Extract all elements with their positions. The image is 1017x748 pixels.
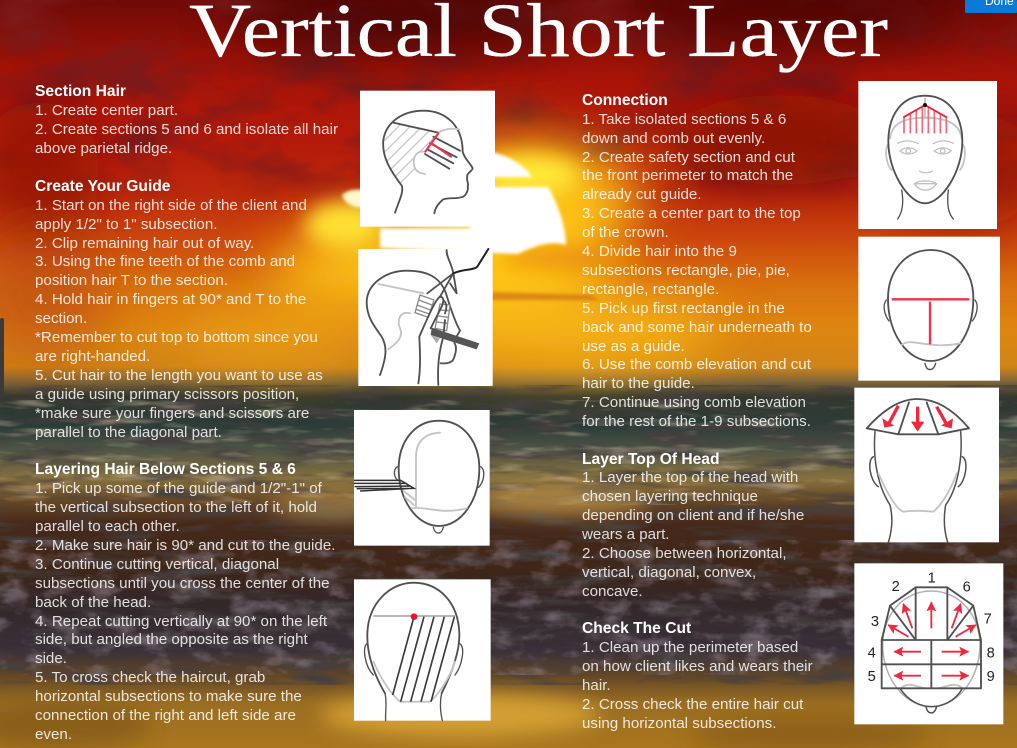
subsection numbers: 8 xyxy=(987,646,995,662)
text: Create Your Guide: *make sure your fingers and scissors are xyxy=(35,405,309,422)
text: Connection: 1. Take isolated sections 5 & 6 xyxy=(582,111,786,128)
text: Layering Hair Below Sections 5 & 6: 3. Continue cutting vertical, diagonal xyxy=(35,556,279,573)
sun xyxy=(342,150,600,300)
subsection numbers: 2 xyxy=(892,579,900,595)
subsection numbers: 7 xyxy=(984,612,992,628)
text: Connection: 4. Divide hair into the 9 xyxy=(582,243,737,260)
text: Layering Hair Below Sections 5 & 6: 5. To cross check the haircut, grab xyxy=(35,669,265,686)
text: Layer Top Of Head xyxy=(582,450,804,600)
subsection numbers: 5 xyxy=(868,669,876,685)
text: Create Your Guide: 5. Cut hair to the length you want to use as xyxy=(35,367,323,384)
text: Check The Cut: 2. Cross check the entire hair cut xyxy=(582,696,803,713)
text: Connection: back and some hair underneath to xyxy=(582,319,812,336)
text: Check The Cut xyxy=(582,620,813,732)
text: Connection: 7. Continue using comb elevation xyxy=(582,394,806,411)
text: Create Your Guide: are right-handed. xyxy=(35,348,150,365)
text: Create Your Guide: apply 1/2" to 1" subsection. xyxy=(35,216,217,233)
text: Connection: already cut guide. xyxy=(582,186,702,203)
text: Layering Hair Below Sections 5 & 6: 1. Pick up some of the guide and 1/2"-1" of xyxy=(35,480,322,497)
text: Connection: Connection xyxy=(582,92,668,109)
text: Layering Hair Below Sections 5 & 6: even. xyxy=(35,726,72,743)
panel: side head with section xyxy=(360,91,495,227)
text: Connection: hair to the guide. xyxy=(582,375,695,392)
text: Create Your Guide: *Remember to cut top to bottom since you xyxy=(35,329,318,346)
text: Layer Top Of Head: 2. Choose between horizontal, xyxy=(582,545,787,562)
text: Layering Hair Below Sections 5 & 6: subsections until you cross the center of the xyxy=(35,575,330,592)
text: Connection: of the crown. xyxy=(582,224,669,241)
hatched hair area xyxy=(384,125,436,183)
text: Section Hair: 2. Create sections 5 and 6 and isolate all hair xyxy=(35,121,338,138)
text: Check The Cut: on how client likes and wears their xyxy=(582,658,813,675)
face features xyxy=(898,141,953,190)
text: Layering Hair Below Sections 5 & 6: connection of the right and left side are xyxy=(35,707,296,724)
text: Connection: the front perimeter to match the xyxy=(582,167,793,184)
text: Layer Top Of Head: Layer Top Of Head xyxy=(582,450,719,468)
gray head outline xyxy=(883,591,980,707)
subsection numbers: 9 xyxy=(987,669,995,685)
text: Connection: 2. Create safety section and cut xyxy=(582,149,795,166)
subsection numbers: 6 xyxy=(963,580,971,596)
text: Section Hair: 1. Create center part. xyxy=(35,102,178,119)
text: Layer Top Of Head: depending on client and if he/she xyxy=(582,507,804,524)
text: Create Your Guide: section. xyxy=(35,310,87,327)
subsection numbers: 4 xyxy=(868,646,876,662)
panel: back of head with diagonal lines xyxy=(354,579,491,721)
text: Connection: for the rest of the 1-9 subsections. xyxy=(582,413,811,430)
text: Create Your Guide: 2. Clip remaining hair out of way. xyxy=(35,235,254,252)
text: Connection: down and comb out evenly. xyxy=(582,130,765,147)
text: Layering Hair Below Sections 5 & 6: back of the head. xyxy=(35,594,151,611)
text: Create Your Guide: a guide using primary scissors position, xyxy=(35,386,299,403)
text: Check The Cut: hair. xyxy=(582,677,611,694)
clouds xyxy=(0,0,1017,210)
text: Create Your Guide: parallel to the diagonal part. xyxy=(35,424,222,441)
panel: back of head with horizontal comb xyxy=(354,410,490,546)
subsection numbers: 3 xyxy=(871,614,879,630)
left edge tab xyxy=(0,318,4,398)
text: Layering Hair Below Sections 5 & 6: side, but angled the opposite as the right xyxy=(35,631,308,648)
text: Check The Cut: 1. Clean up the perimeter based xyxy=(582,639,798,656)
text: Layer Top Of Head: concave. xyxy=(582,583,643,600)
text: Connection: use as a guide. xyxy=(582,338,685,355)
button: Done xyxy=(965,0,1017,13)
panel: back of head with T part xyxy=(858,237,1000,381)
text: Connection: 3. Create a center part to the top xyxy=(582,205,801,222)
text: Layering Hair Below Sections 5 & 6: Layering Hair Below Sections 5 & 6 xyxy=(35,461,296,478)
text: Connection: 5. Pick up first rectangle in the xyxy=(582,300,785,317)
panel: nine numbered subsections xyxy=(854,563,1003,724)
text: Layering Hair Below Sections 5 & 6: parallel to each other. xyxy=(35,518,180,535)
panel: face with crown triangle xyxy=(858,81,997,229)
text: Section Hair xyxy=(35,83,338,157)
text: Section Hair: above parietal ridge. xyxy=(35,140,172,157)
sea texture xyxy=(0,385,1017,685)
text: Layering Hair Below Sections 5 & 6: side. xyxy=(35,650,67,667)
text: Connection: 6. Use the comb elevation and cut xyxy=(582,356,811,373)
text: Check The Cut: using horizontal subsections. xyxy=(582,715,776,732)
text: Layer Top Of Head: 1. Layer the top of the head with xyxy=(582,469,798,486)
text: Create Your Guide xyxy=(35,178,323,441)
text: Create Your Guide: Create Your Guide xyxy=(35,178,170,195)
text: Layering Hair Below Sections 5 & 6: the vertical subsection to the left of it, hold xyxy=(35,499,317,516)
subsection numbers xyxy=(868,571,995,685)
text: Connection: subsections rectangle, pie, pie, xyxy=(582,262,790,279)
text: Layering Hair Below Sections 5 & 6: 2. Make sure hair is 90* and cut to the guide. xyxy=(35,537,335,554)
text: Section Hair: Section Hair xyxy=(35,83,126,100)
text: Connection: rectangle, rectangle. xyxy=(582,281,719,298)
text: Create Your Guide: 1. Start on the right side of the client and xyxy=(35,197,307,214)
subsection arrows xyxy=(888,602,976,676)
text: Layering Hair Below Sections 5 & 6: horizontal subsections to make sure the xyxy=(35,688,302,705)
text: Layer Top Of Head: chosen layering technique xyxy=(582,488,758,505)
text: Layer Top Of Head: wears a part. xyxy=(582,526,670,543)
text: Create Your Guide: 4. Hold hair in fingers at 90* and T to the xyxy=(35,291,306,308)
panel: back of head with crown arrows xyxy=(854,388,999,542)
text: Layering Hair Below Sections 5 & 6 xyxy=(35,461,335,743)
text: Layering Hair Below Sections 5 & 6: 4. Repeat cutting vertically at 90* on the left xyxy=(35,613,327,630)
comb sections xyxy=(415,295,450,331)
text: Create Your Guide: position hair T to the section. xyxy=(35,272,228,289)
panel: side head with comb and scissors xyxy=(358,249,493,386)
text: Layer Top Of Head: vertical, diagonal, convex, xyxy=(582,564,756,581)
text: Create Your Guide: 3. Using the fine teeth of the comb and xyxy=(35,253,295,270)
subsection grid xyxy=(882,587,981,688)
text: Check The Cut: Check The Cut xyxy=(582,620,691,637)
subsection numbers: 1 xyxy=(928,571,936,587)
text: Connection xyxy=(582,92,812,430)
